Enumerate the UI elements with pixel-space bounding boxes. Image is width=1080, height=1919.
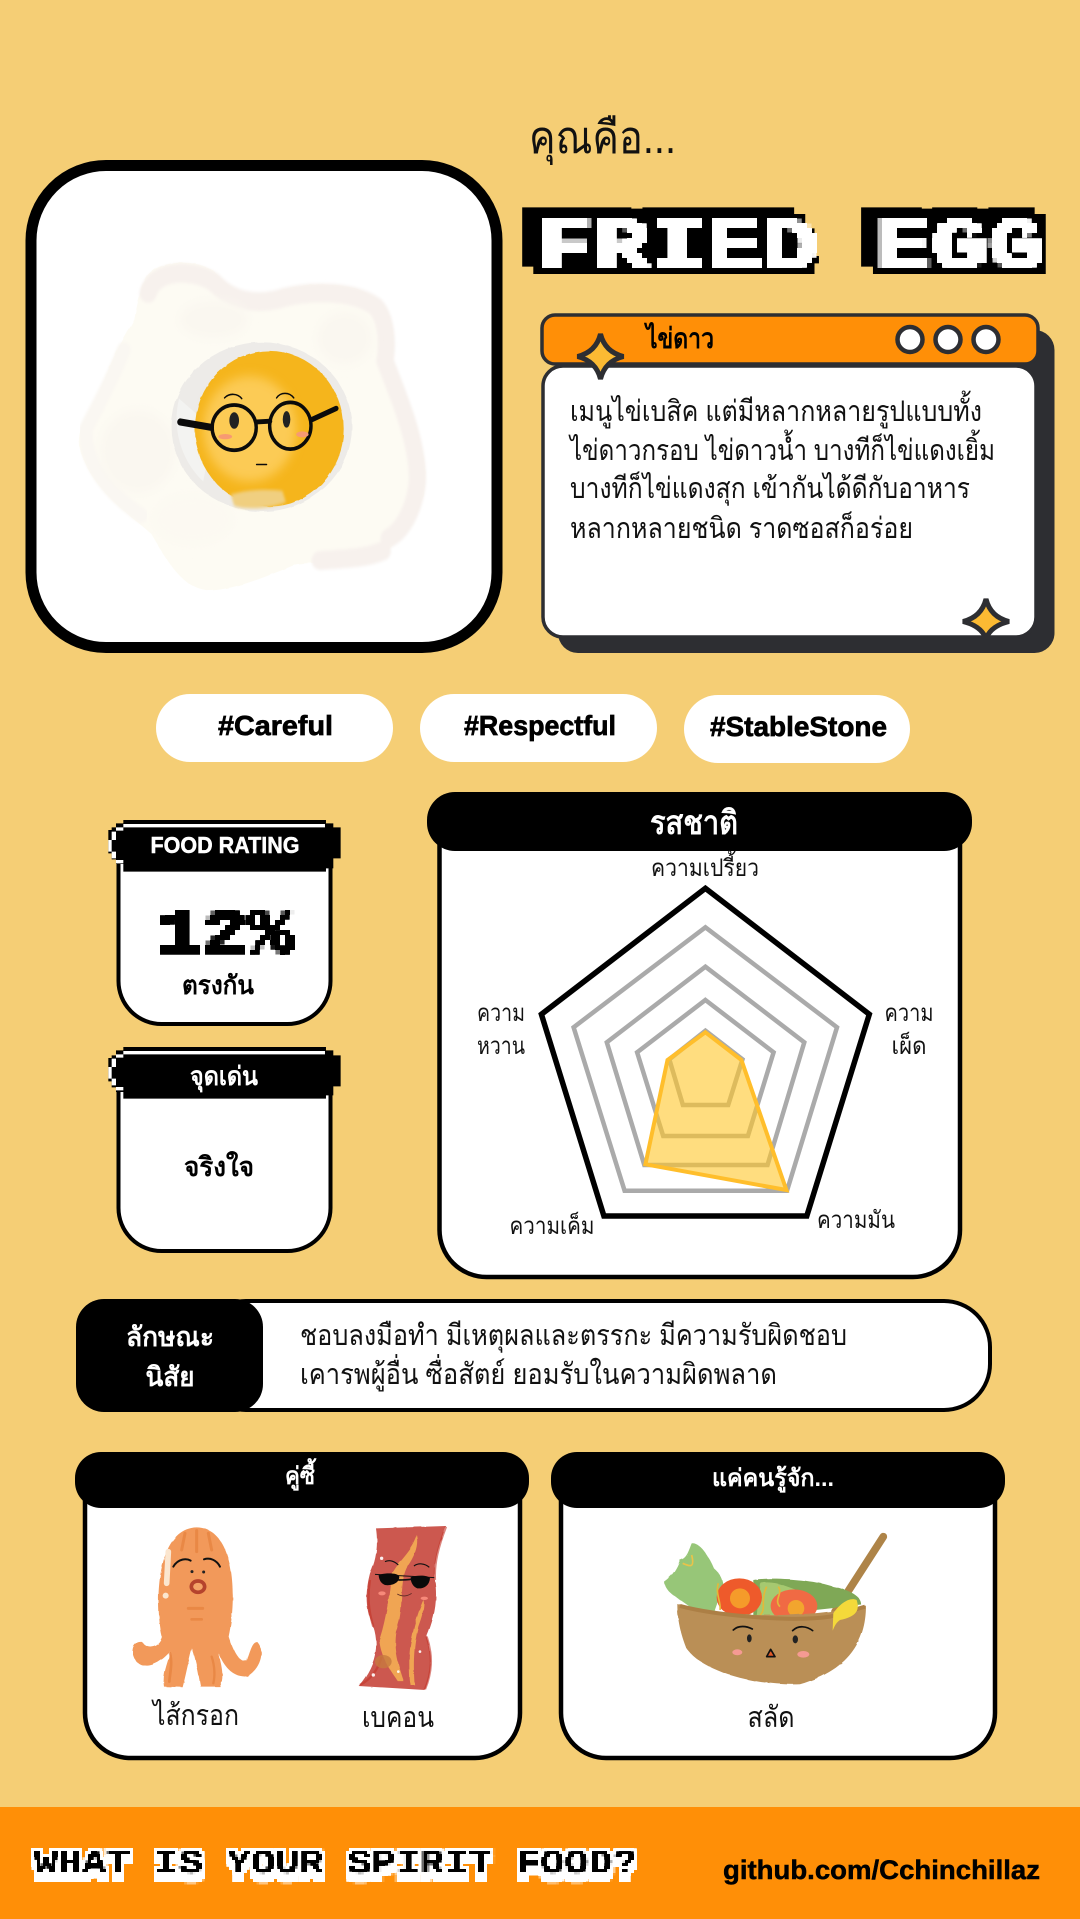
- hashtag: stable stone: [684, 695, 910, 763]
- highlight heading: จุดเด่น: [190, 1061, 258, 1093]
- icon: star bottom: [963, 599, 1009, 639]
- radar axis labels: ความมัน: [817, 1207, 895, 1234]
- panel: best friends: [75, 1452, 529, 1758]
- personality text: ชอบลงมือทำ มีเหตุผลและตรรกะ มีความรับผิดชอบ: [300, 1320, 847, 1353]
- radar axis labels: [477, 850, 934, 1240]
- personality label: นิสัย: [146, 1362, 194, 1392]
- description text: เมนูไข่เบสิค แต่มีหลากหลายรูปแบบทั้ง: [570, 390, 982, 429]
- portrait frame: [31, 166, 497, 648]
- radar data area: [645, 1032, 786, 1190]
- personality label: [126, 1322, 214, 1392]
- panel: fried egg portrait: [31, 166, 497, 648]
- footer tagline: WHAT IS YOUR SPIRIT FOOD?: [34, 1846, 637, 1884]
- label: sausage: ไส้กรอก: [151, 1698, 239, 1732]
- radar axis labels: เผ็ด: [892, 1031, 926, 1060]
- personality label: ลักษณะ: [126, 1322, 214, 1352]
- subtitle: you are: คุณคือ...: [529, 112, 676, 165]
- window shadow: [558, 330, 1054, 653]
- window body: [543, 366, 1036, 637]
- highlight value: จริงใจ: [184, 1151, 254, 1182]
- rating caption: ตรงกัน: [182, 970, 254, 1000]
- icon: sausage octopus: [133, 1527, 261, 1687]
- personality text: เคารพผู้อื่น ซื่อสัตย์ ยอมรับในความผิดพลาด: [300, 1354, 777, 1392]
- rating value: 12%: [156, 900, 295, 971]
- friends heading: คู่ซี้: [285, 1457, 317, 1491]
- icon: fried egg character: [79, 263, 425, 591]
- title blocky backdrop: [522, 207, 1046, 274]
- glasses: [180, 393, 336, 465]
- hashtag: careful: [156, 694, 393, 762]
- rating card body: [118, 860, 330, 1024]
- highlight card body: [118, 1088, 330, 1251]
- panel: personality: [76, 1299, 990, 1412]
- description text: [568, 390, 995, 545]
- description text: หลากหลายชนิด ราดซอสก็อร่อย: [570, 510, 913, 545]
- label: salad: สลัด: [748, 1702, 794, 1734]
- acquaintance heading: แค่คนรู้จัก...: [712, 1465, 834, 1493]
- icon: star top: [578, 334, 624, 379]
- radar axis labels: ความเค็ม: [510, 1211, 594, 1240]
- acquaintance card body: [561, 1490, 995, 1758]
- description text: ไข่ดาวกรอบ ไข่ดาวน้ำ บางทีก็ไข่แดงเยิ้ม: [568, 429, 995, 467]
- personality bar: [200, 1301, 990, 1410]
- hashtag: respectful: [420, 694, 657, 762]
- radar header: [427, 792, 972, 851]
- icon: bacon: [359, 1526, 446, 1690]
- radar axis labels: ความ: [477, 1000, 525, 1027]
- hashtag: stable stone: #StableStone: [710, 711, 887, 742]
- panel: flavour radar: [427, 792, 972, 1277]
- radar chart: [541, 888, 869, 1216]
- panel: food rating: [108, 820, 341, 1024]
- radar axis labels: ความ: [884, 1000, 934, 1027]
- friends header: [75, 1452, 529, 1508]
- personality label block: [76, 1299, 263, 1412]
- title: fried egg: [522, 207, 1046, 290]
- friends card body: [85, 1490, 520, 1758]
- icon: salad bowl: [664, 1537, 883, 1684]
- window title bar: [542, 315, 1038, 364]
- footer credit: github.com/Cchinchillaz: [723, 1855, 1040, 1885]
- panel: highlight: [108, 1047, 341, 1251]
- highlight header: [108, 1047, 341, 1099]
- panel: acquaintance: [551, 1452, 1005, 1758]
- description text: บางทีก็ไข่แดงสุก เข้ากันได้ดีกับอาหาร: [570, 470, 970, 506]
- radar axis labels: ความเปรี้ยว: [651, 850, 759, 882]
- hashtag: respectful: #Respectful: [464, 710, 616, 741]
- radar card body: [440, 830, 960, 1277]
- acquaintance header: [551, 1452, 1005, 1508]
- rating header: [108, 820, 341, 872]
- radar axis labels: หวาน: [477, 1033, 525, 1060]
- window buttons: [898, 327, 998, 352]
- window heading: ไข่ดาว: [644, 322, 714, 354]
- panel: description window: [542, 315, 1054, 653]
- title text: FRIED EGG: [537, 208, 1044, 290]
- rating header label: FOOD RATING: [150, 832, 300, 858]
- hashtag: careful: #Careful: [218, 710, 333, 741]
- label: bacon: เบคอน: [362, 1702, 434, 1734]
- personality text: [300, 1320, 847, 1392]
- radar heading: รสชาติ: [650, 804, 738, 841]
- footer band: [0, 1807, 1080, 1919]
